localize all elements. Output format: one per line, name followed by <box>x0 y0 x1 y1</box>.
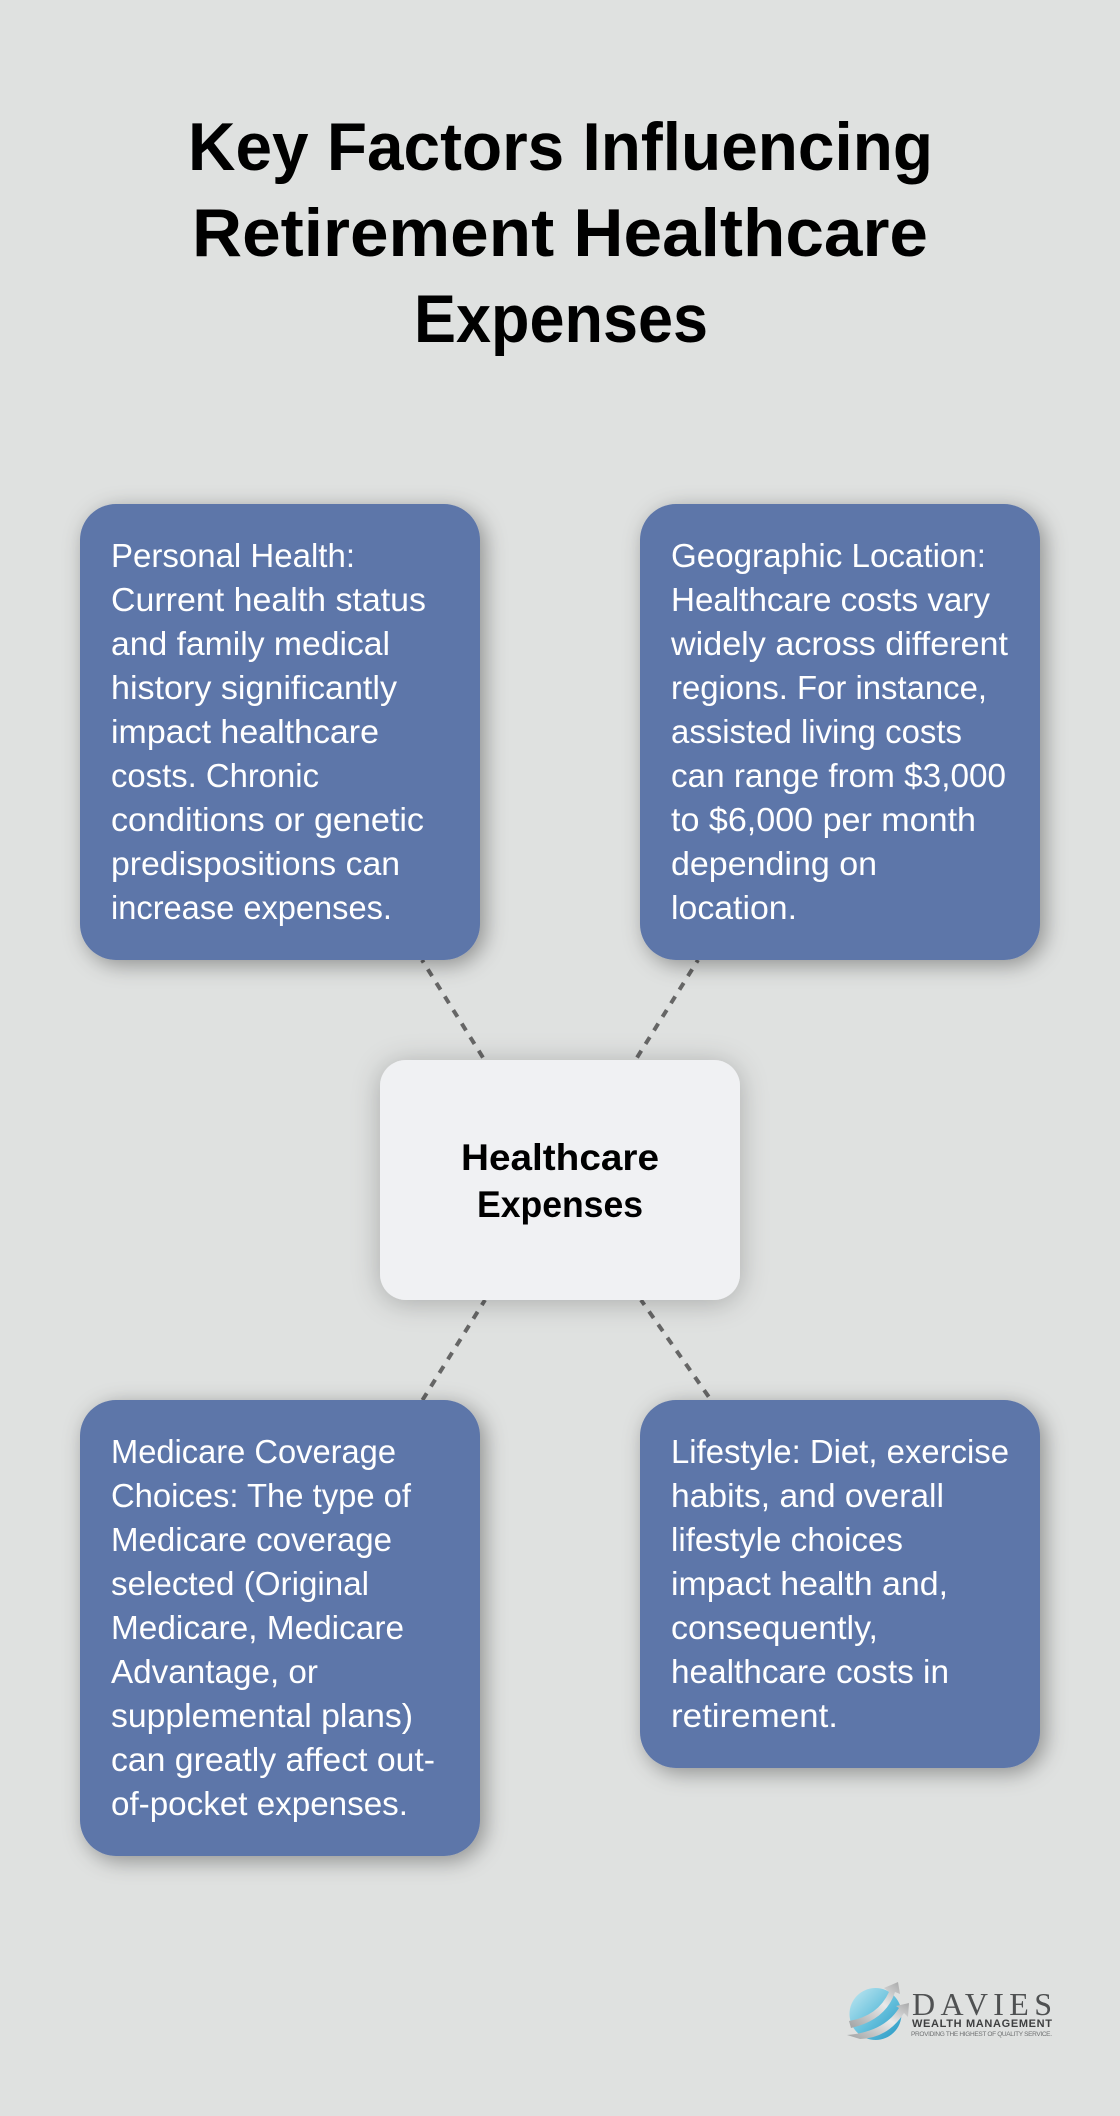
panel: personal health: Personal Health: <box>111 537 355 574</box>
panel: geographic location: to $6,000 per month <box>671 801 976 838</box>
panel: geographic location: depending on <box>671 845 877 882</box>
panel: geographic location <box>640 504 1040 960</box>
panel: medicare coverage choices: of-pocket expenses. <box>111 1785 408 1822</box>
panel: lifestyle <box>640 1400 1040 1768</box>
logo: davies wealth management: PROVIDING THE HIGHEST OF QUALITY SERVICE. <box>911 2031 1052 2038</box>
title <box>188 109 933 357</box>
panel: personal health: increase expenses. <box>111 889 392 926</box>
panel: medicare coverage choices: Choices: The type of <box>111 1477 412 1514</box>
panel: medicare coverage choices: Medicare coverage <box>111 1521 392 1558</box>
title: Retirement Healthcare <box>192 195 928 271</box>
logo: davies wealth management: WEALTH MANAGEMENT <box>912 2018 1052 2030</box>
panel: centre healthcare expenses: Expenses <box>477 1184 643 1225</box>
panel: personal health: Current health status <box>111 581 426 618</box>
panel: personal health: history significantly <box>111 669 398 706</box>
panel: lifestyle: impact health and, <box>671 1565 948 1602</box>
connector: lifestyle to centre <box>641 1300 711 1400</box>
panel: lifestyle: Lifestyle: Diet, exercise <box>671 1433 1009 1470</box>
panel: medicare coverage choices <box>80 1400 480 1856</box>
panel: personal health <box>80 504 480 960</box>
title: Key Factors Influencing <box>188 109 933 185</box>
panel: personal health: and family medical <box>111 625 390 662</box>
panel: lifestyle: healthcare costs in <box>671 1653 949 1690</box>
panel: personal health: conditions or genetic <box>111 801 424 838</box>
title: Expenses <box>414 281 708 357</box>
panel: lifestyle: retirement. <box>671 1697 838 1734</box>
panel: medicare coverage choices: Medicare Coverage <box>111 1433 396 1470</box>
panel: personal health: predispositions can <box>111 845 400 882</box>
panel: geographic location: widely across different <box>670 625 1008 662</box>
logo: davies wealth management: DAVIES <box>912 1986 1052 2022</box>
panel: medicare coverage choices: supplemental plans) <box>111 1697 413 1734</box>
panel: lifestyle: habits, and overall <box>671 1477 944 1514</box>
icon: globe with arrows <box>847 1982 909 2040</box>
connector: geographic location to centre <box>633 960 698 1064</box>
panel: geographic location: Healthcare costs vary <box>671 581 990 618</box>
panel: geographic location: Geographic Location: <box>671 537 986 574</box>
panel: lifestyle: lifestyle choices <box>671 1521 903 1558</box>
panel: medicare coverage choices: selected (Original <box>111 1565 369 1602</box>
panel: personal health: impact healthcare <box>111 713 379 750</box>
panel: geographic location: assisted living costs <box>671 713 962 750</box>
connector: personal health to centre <box>422 960 487 1064</box>
panel: personal health: costs. Chronic <box>111 757 319 794</box>
logo: davies wealth management <box>847 1982 1052 2040</box>
panel: centre healthcare expenses: Healthcare <box>461 1137 659 1178</box>
panel: medicare coverage choices: Advantage, or <box>111 1653 318 1690</box>
panel: medicare coverage choices: can greatly affect out- <box>111 1741 435 1778</box>
panel: geographic location: regions. For instance, <box>671 669 987 706</box>
panel: geographic location: location. <box>671 889 797 926</box>
panel: geographic location: can range from $3,000 <box>671 757 1006 794</box>
panel: centre healthcare expenses <box>380 1060 740 1300</box>
panel: medicare coverage choices: Medicare, Medicare <box>111 1609 404 1646</box>
connector: medicare coverage to centre <box>420 1300 485 1404</box>
panel: lifestyle: consequently, <box>671 1609 878 1646</box>
